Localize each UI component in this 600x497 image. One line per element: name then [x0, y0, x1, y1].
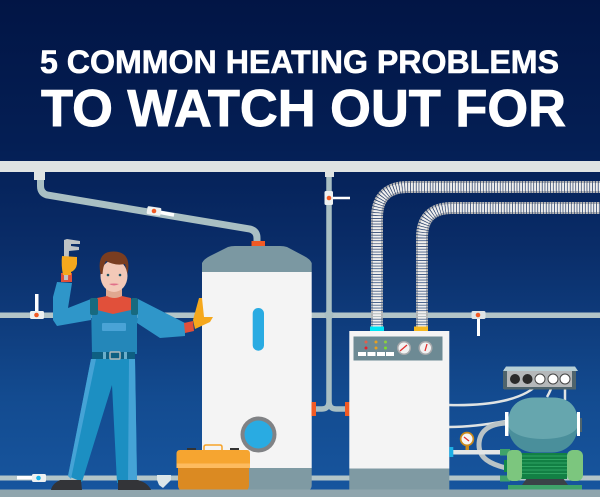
neck	[106, 285, 122, 300]
control panel	[354, 336, 442, 360]
right arm	[137, 299, 185, 338]
valve: right	[472, 311, 486, 336]
left arm	[53, 282, 91, 326]
feed pipe	[449, 447, 510, 482]
horizontal middle pipe	[0, 312, 600, 318]
boiler	[349, 331, 449, 491]
pump motor	[504, 450, 583, 491]
pressure gauge	[460, 432, 474, 451]
orange connectors	[312, 402, 350, 416]
hose collars	[370, 326, 428, 332]
water tank	[202, 241, 312, 491]
title	[40, 44, 566, 138]
title: TO WATCH OUT FOR	[41, 80, 566, 138]
legs	[68, 359, 137, 483]
pump return hose	[479, 423, 506, 468]
straps	[90, 298, 138, 315]
horizontal lower pipe	[0, 476, 600, 480]
tank gauge	[253, 308, 264, 351]
eyes and mouth	[107, 274, 121, 286]
floor	[0, 490, 600, 497]
hair	[100, 251, 128, 274]
valve: vertical pipe	[324, 191, 350, 205]
junction box	[503, 366, 578, 390]
pocket	[102, 323, 126, 331]
technician	[51, 239, 213, 490]
title: 5 COMMON HEATING PROBLEMS	[40, 44, 559, 80]
toolbox	[176, 445, 250, 491]
head	[100, 260, 128, 292]
raised glove	[62, 256, 77, 275]
cuffs	[61, 273, 72, 282]
tank porthole	[240, 416, 276, 452]
pump wiring	[449, 382, 565, 427]
vertical pipe	[316, 172, 345, 409]
open glove	[193, 298, 213, 329]
valve: bottom left	[17, 474, 46, 482]
wrench	[64, 239, 80, 280]
pump tank	[505, 398, 582, 452]
bottom pipe bracket	[157, 475, 171, 488]
shoes	[51, 480, 82, 490]
diagonal pipe to tank	[34, 172, 257, 243]
flexible hoses	[377, 187, 600, 330]
valve: left	[30, 294, 44, 319]
red shirt	[97, 296, 131, 314]
torso	[91, 301, 137, 354]
belt	[92, 352, 135, 359]
valve: diagonal pipe	[146, 206, 174, 216]
ceiling pipe	[0, 161, 600, 172]
